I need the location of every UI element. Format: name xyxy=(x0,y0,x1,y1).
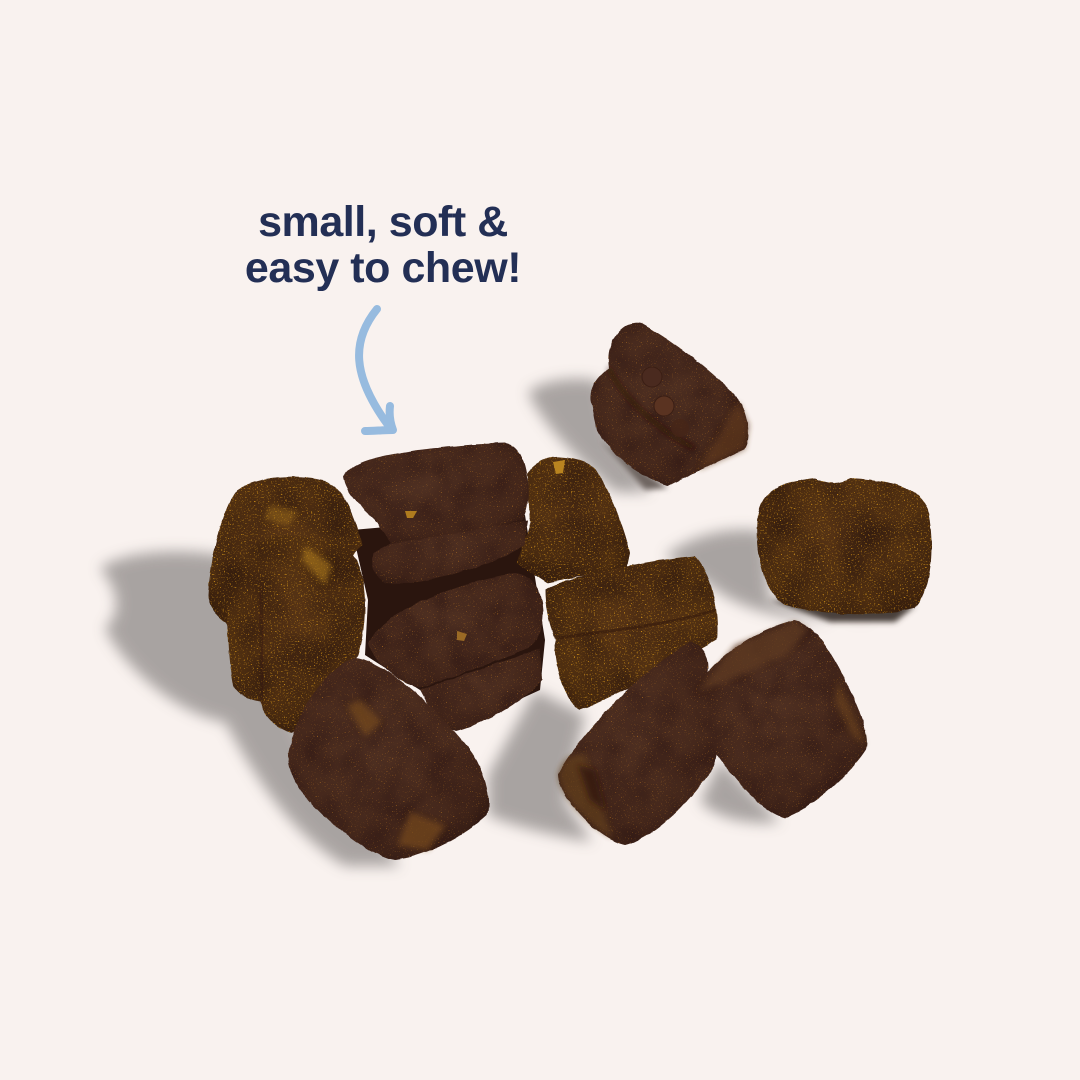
treat: right xyxy=(757,478,932,614)
shadows xyxy=(100,379,915,866)
treat: center xyxy=(368,573,543,731)
treat: center right xyxy=(545,556,718,710)
treat: back middle xyxy=(517,457,630,583)
arrow xyxy=(359,309,393,431)
treat: bottom right large xyxy=(694,620,867,818)
treat: top center xyxy=(343,443,528,584)
treat: tall left xyxy=(227,535,365,733)
dark gaps between treats xyxy=(352,515,545,722)
heading: small, soft & xyxy=(258,198,508,246)
heading: easy to chew! xyxy=(245,244,521,292)
treat: front bottom xyxy=(288,658,489,860)
heading xyxy=(245,198,521,292)
treat: top right xyxy=(591,323,749,486)
treat: bottom right small xyxy=(558,642,718,845)
treat: back left xyxy=(208,477,362,624)
